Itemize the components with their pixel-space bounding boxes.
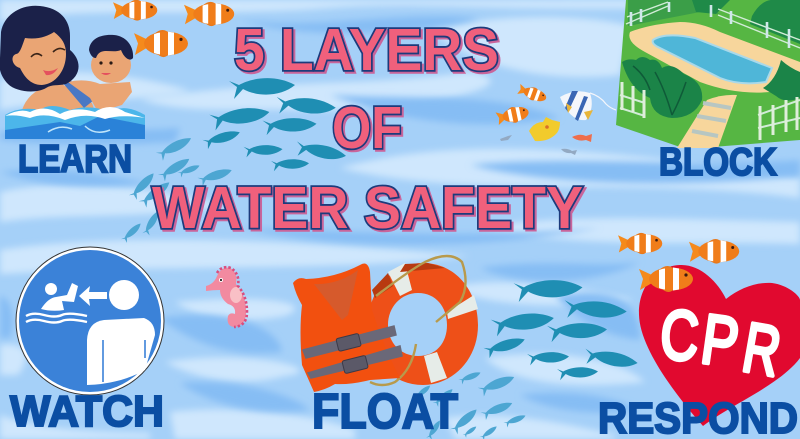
- title line 2: OF: [332, 95, 402, 161]
- title line 2: OF: [334, 97, 404, 163]
- title line 1: 5 LAYERS: [234, 17, 499, 83]
- CPR lettering: R: [737, 308, 786, 391]
- title line 3: WATER SAFETY: [154, 177, 585, 243]
- icon: watch sign: [16, 247, 164, 395]
- icon: CPR heart: [639, 265, 800, 426]
- label: LEARN: LEARN: [18, 138, 132, 181]
- icon: life ring: [368, 256, 478, 385]
- fish school: lower right: [413, 280, 639, 439]
- title line 3: WATER SAFETY: [152, 175, 583, 241]
- CPR lettering: P: [697, 300, 743, 382]
- label: WATCH: WATCH: [10, 387, 164, 436]
- label: FLOAT: FLOAT: [312, 385, 458, 439]
- icon: fenced pool: [616, 0, 800, 148]
- fish school: top: [120, 78, 347, 244]
- icon: seahorse: [206, 267, 247, 327]
- title line 1: 5 LAYERS: [236, 19, 501, 85]
- title: [152, 17, 585, 243]
- icon: mother and child swimming: [0, 6, 145, 139]
- clownfish group: top left: [113, 0, 234, 57]
- label: BLOCK: BLOCK: [659, 141, 777, 184]
- CPR lettering: [658, 295, 786, 391]
- clownfish group: lower right: [618, 233, 739, 292]
- reef fish cluster: [495, 82, 616, 155]
- CPR lettering: C: [658, 295, 701, 376]
- icon: life vest: [293, 264, 402, 392]
